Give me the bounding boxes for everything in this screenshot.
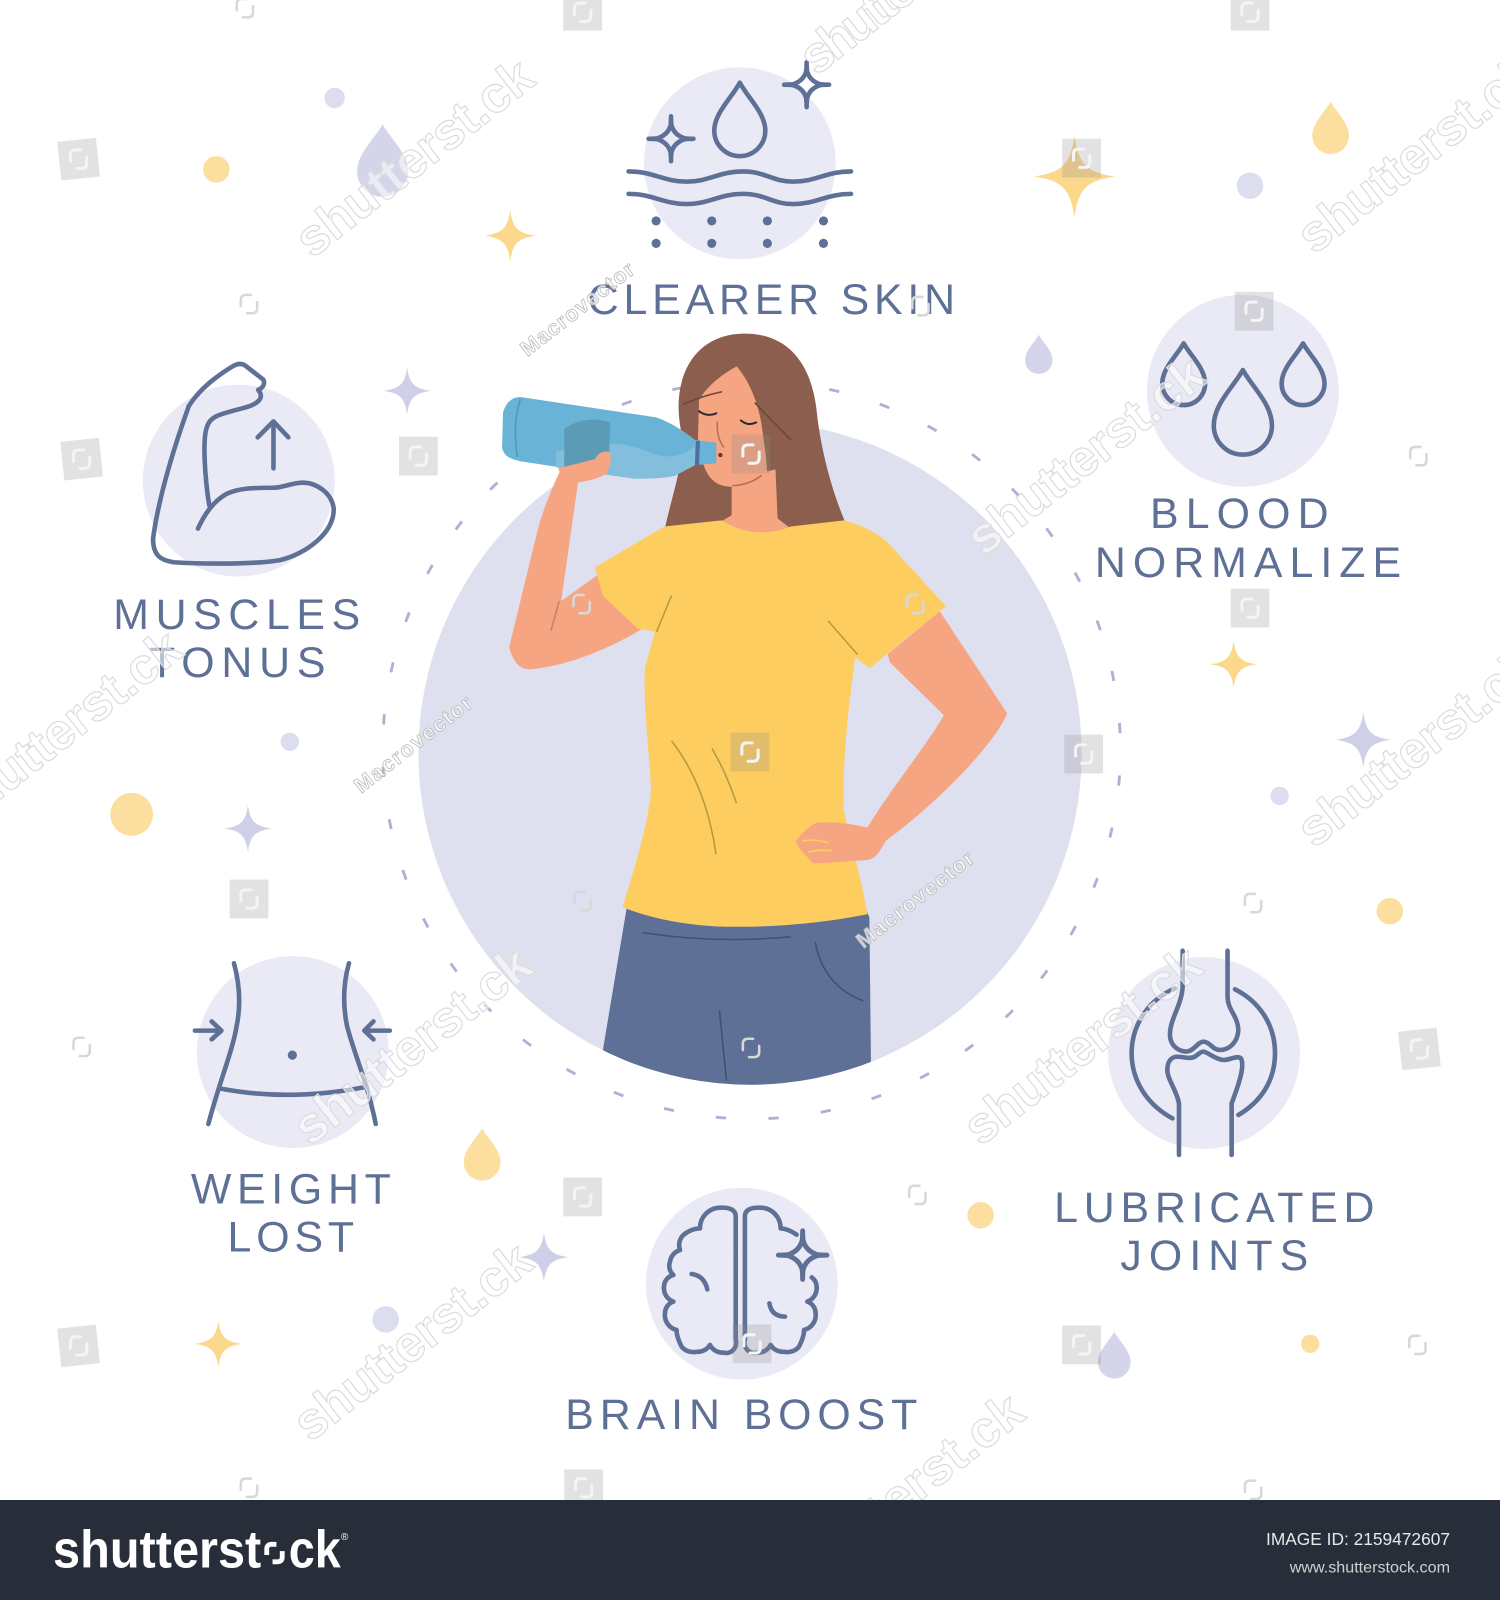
- label: blood normalize: NORMALIZE: [1095, 539, 1401, 587]
- label: muscles tonus: [113, 591, 360, 687]
- blue shorts: [602, 908, 871, 1085]
- icon panel: lubricated joints: [1108, 951, 1300, 1155]
- icon panel: clearer skin: [629, 62, 851, 259]
- yellow t-shirt: [595, 520, 946, 927]
- stock watermark overlay: Macrovector: [350, 691, 477, 798]
- label: weight lost: [191, 1166, 391, 1262]
- label: lubricated joints: JOINTS: [1120, 1232, 1308, 1280]
- central lavender circle: [418, 421, 1082, 1085]
- dashed orbit ring: [383, 381, 1120, 1119]
- neck: [719, 469, 791, 534]
- stock watermark overlay: shutterst.ck: [284, 47, 545, 268]
- icon panel: weight lost: [195, 956, 390, 1148]
- label: muscles tonus: MUSCLES: [113, 591, 360, 639]
- stock watermark overlay: shutterst.ck: [282, 934, 543, 1156]
- water bottle: [502, 397, 716, 484]
- decorative confetti dots, drops and stars: [110, 88, 1403, 1379]
- footer logo: ck: [289, 1520, 341, 1579]
- footer website: www.shutterstock.com: [1289, 1558, 1450, 1576]
- label: blood normalize: [1095, 490, 1401, 587]
- label: blood normalize: BLOOD: [1150, 490, 1329, 538]
- label: lubricated joints: LUBRICATED: [1054, 1184, 1374, 1232]
- footer bar: [0, 1500, 1500, 1600]
- stock watermark overlay: shutterst.ck: [955, 345, 1216, 566]
- stock watermark overlay: shutterst.ck: [952, 934, 1213, 1156]
- face: [698, 366, 767, 487]
- woman drinking from bottle: [502, 334, 1007, 1102]
- hair: [665, 334, 845, 533]
- facial features: [684, 392, 791, 486]
- label: muscles tonus: TONUS: [149, 639, 326, 687]
- label: lubricated joints: [1054, 1184, 1374, 1280]
- icon panel: blood normalize: [1147, 295, 1339, 487]
- shirt creases: [657, 596, 857, 854]
- label: brain boost: BRAIN BOOST: [565, 1391, 917, 1439]
- icon panel: brain boost: [646, 1188, 838, 1380]
- footer image id: IMAGE ID: 2159472607: [1266, 1529, 1450, 1549]
- stock watermark overlay: Macrovector: [516, 257, 639, 361]
- stock watermark overlay: Macrovector: [852, 846, 979, 953]
- stock watermark overlay: shutterst.ck: [282, 1230, 543, 1452]
- label: clearer skin: CLEARER SKIN: [588, 276, 955, 324]
- footer logo: ®: [341, 1532, 349, 1543]
- label: weight lost: WEIGHT: [191, 1166, 391, 1214]
- footer logo: shutterst: [53, 1520, 262, 1579]
- arm on hip: [796, 611, 1007, 863]
- icon panel: muscles tonus: [143, 364, 335, 577]
- stock watermark overlay: terst.ck: [854, 1381, 1035, 1539]
- raised arm: [509, 451, 643, 669]
- label: weight lost: LOST: [228, 1214, 354, 1262]
